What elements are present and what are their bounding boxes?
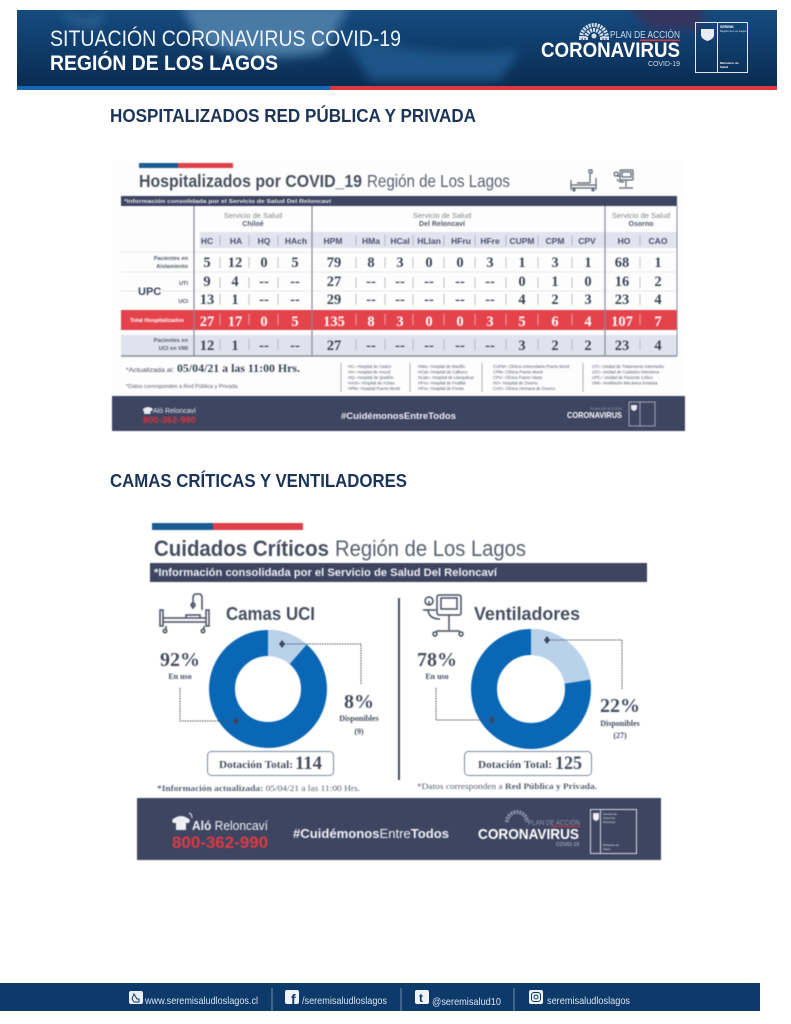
info band [150,563,647,582]
icon: ventilator small [614,170,633,188]
seremi logo: Ministerio de [720,61,739,65]
panel footer band [137,798,661,860]
row: uti: -- [424,274,434,290]
row: pacientes vmi: 27 [327,338,341,354]
row: uti [203,274,662,290]
row: uci: 13 [200,292,214,308]
service header: chiloe: Chiloé [242,221,264,228]
callout: disponibles ventiladores [544,636,640,740]
row: pacientes vmi: -- [259,338,269,354]
row: uci: -- [259,292,269,308]
row: total hospitalizados: 7 [654,314,662,330]
row: pacientes vmi: -- [455,338,465,354]
flag strip [139,163,233,168]
legend: clinics and units: CUPM= Clínica Universitaria Puerto Montt [493,364,570,369]
row: uci: -- [485,292,495,308]
row: total hospitalizados: 27 [200,314,214,330]
row labels: UCI [178,299,188,305]
hotline number: 800-362-990 [172,833,268,852]
row labels: UCI en VMI [159,346,188,352]
row: uti: 27 [327,274,341,290]
panel title: Cuidados Críticos [154,536,329,561]
icon: web [129,991,143,1004]
callout: en uso ventiladores: 78% [417,649,457,671]
row labels: Total Hospitalizados [130,318,184,324]
row: aislamiento: 0 [425,255,433,271]
callout: en uso camas: 92% [160,649,200,671]
column codes: HFru [451,236,471,246]
hotline name: Aló Reloncaví [153,408,196,415]
ministry logo: Ministerio de [603,843,619,847]
vmi band [121,335,677,355]
row labels [130,256,189,352]
ministry logo: Salud [603,847,611,851]
row separators [121,252,677,291]
legend: hospitals: HQ= Hospital de Quellón [348,375,394,380]
plan de accion label: PLAN DE ACCIÓN [528,818,580,827]
column codes: HLlan [417,236,441,246]
callout: disponibles ventiladores: Disponibles [600,719,640,728]
camas uci label: Camas UCI [226,604,315,624]
column codes [201,236,668,246]
ministry logo: Servicio de [603,812,617,816]
heading: camas criticas: CAMAS CRÍTICAS Y VENTILADORES [110,470,407,491]
column codes: HAch [285,236,307,246]
row: uti: 16 [615,274,629,290]
row: uci: 23 [615,292,629,308]
row: uti: 0 [584,274,592,290]
seremi logo: SEREMI [720,25,733,29]
row: total hospitalizados: 17 [228,314,242,330]
header title line 2: REGIÓN DE LOS LAGOS [50,51,278,75]
box: dotacion ventiladores: Dotación Total: [478,760,552,771]
callout: disponibles camas: (9) [354,727,364,736]
column codes: CPM [546,236,564,246]
icon: plan de accion dome [581,25,607,38]
total band [121,310,677,330]
service header: osorno: Servicio de Salud [612,211,670,220]
hashtag: #CuidémonosEntreTodos [341,411,456,422]
row: aislamiento: 0 [456,255,464,271]
row: pacientes vmi: -- [424,338,434,354]
legend: clinics and units: UTI= Unidad de Tratamiento Intermedio [592,364,665,369]
icon: phone small [143,407,153,414]
row: aislamiento: 79 [327,255,341,271]
update note: *Actualizada al: [126,367,174,374]
row: uti: -- [485,274,495,290]
row: aislamiento: 1 [654,255,662,271]
legend: clinics and units: HO= Hospital de Osorno [493,380,538,386]
callout: disponibles ventiladores: 22% [600,695,640,717]
logo small [629,402,655,426]
row: pacientes vmi: 1 [231,338,239,354]
row: uti: 1 [551,274,559,290]
plan de accion label: PLAN DE ACCIÓN [610,28,680,41]
row: uci: 4 [654,292,662,308]
column codes: HFre [480,236,500,246]
row: aislamiento: 68 [615,255,629,271]
row: total hospitalizados: 3 [486,314,494,330]
legend separators [341,363,583,392]
row: pacientes vmi: 3 [518,338,526,354]
instagram handle: seremisaludloslagos [547,995,630,1007]
row: uci: 2 [551,292,559,308]
legend: hospitals: HFre= Hospital de Fresia [418,386,464,391]
service header: osorno: Osorno [629,221,653,228]
hotline name: Aló Reloncaví [192,818,268,833]
row: total hospitalizados: 0 [456,314,464,330]
row: uti: -- [259,274,269,290]
legend: hospitals: HC= Hospital de Castro [348,364,392,369]
row: total hospitalizados: 107 [611,314,633,330]
legend: hospitals: HLlan= Hospital de Llanquihue [418,375,475,380]
row labels: Pacientes en [154,256,189,262]
column codes: HQ [258,236,271,246]
icon: hospital bed [160,594,209,633]
plan label small: PLAN DE ACCIÓN [590,406,622,411]
column codes: HPM [324,236,342,246]
row: aislamiento: 1 [518,255,526,271]
legend: clinics and units [493,364,665,391]
heading: hospitalizados: HOSPITALIZADOS RED PÚBLICA Y PRIVADA [110,105,476,126]
icon: tumblr: t [419,991,423,1005]
icon: dome [507,812,527,822]
row: aislamiento: 5 [203,255,211,271]
ministry logo [590,809,636,854]
column codes: HA [230,236,242,246]
icon: ventilator [423,595,463,636]
row labels: Pacientes en [154,338,189,344]
row: pacientes vmi: 23 [615,338,629,354]
callout: en uso ventiladores [417,649,495,724]
covid-19 label: COVID-19 [556,842,579,848]
flag strip [152,523,303,530]
service header: reloncavi [413,211,471,228]
icon: facebook [285,990,299,1007]
seremi logo: Salud [720,65,728,69]
row: pacientes vmi [200,338,662,354]
service header: reloncavi: Del Reloncaví [419,221,466,228]
service header: osorno [612,211,670,228]
seremi logo [696,22,748,73]
row labels: UPC [138,286,161,298]
callout: disponibles ventiladores: (27) [613,731,627,740]
row: uti: -- [395,274,405,290]
row: total hospitalizados: 3 [396,314,404,330]
hashtag: #CuidémonosEntreTodos [293,826,449,841]
legend: clinics and units: CAO= Clínica Alemana de Osorno [493,386,556,391]
callout: en uso camas [160,649,239,725]
row: total hospitalizados: 5 [518,314,526,330]
row: uti: 0 [518,274,526,290]
info band: *Información consolidada por el Servicio de Salud Del Reloncaví [124,199,331,205]
legend: hospitals: HPM= Hospital Puerto Montt [348,386,401,391]
column codes: HO [618,236,631,246]
icon: facebook: f [291,991,296,1007]
row: uti: -- [290,274,300,290]
row: aislamiento: 5 [291,255,299,271]
row: uci: -- [424,292,434,308]
info band: *Información consolidada por el Servicio de Salud Del Reloncaví [154,567,498,579]
column codes: CUPM [509,236,535,246]
row: total hospitalizados: 0 [260,314,268,330]
footer bar [0,983,760,1011]
callout: en uso ventiladores: En uso [425,672,449,681]
panel: cuidados criticos [137,523,661,860]
legend: clinics and units: CPV= Clínica Puerto Varas [493,375,542,380]
box: dotacion camas [208,752,334,776]
total row tick marks [220,314,640,325]
service header: chiloe [224,211,282,228]
update note: 05/04/21 a las 11:00 Hrs. [177,363,300,375]
row: pacientes vmi: -- [395,338,405,354]
code header band [200,232,677,248]
coronavirus label: CORONAVIRUS [541,39,680,62]
table title: Hospitalizados por COVID_19 [139,171,362,191]
row: pacientes vmi: -- [485,338,495,354]
row: aislamiento: 3 [396,255,404,271]
panel title: Región de Los Lagos [335,536,526,561]
row: uci: 1 [231,292,239,308]
legend: clinics and units: UPC= Unidad de Paciente Crítico [592,375,654,380]
red underline [640,40,680,41]
box: dotacion camas: 114 [295,753,322,774]
icon: instagram [529,990,543,1004]
icon: tumblr [415,990,429,1005]
legend: hospitals: HFru= Hospital de Frutillar [418,380,467,386]
header banner [17,4,777,90]
row: uti: 2 [654,274,662,290]
update note: *Datos corresponden a Red Pública y Privada. [126,384,239,390]
column codes: CAO [649,236,668,246]
legend: hospitals [348,364,475,391]
red underline [551,826,580,827]
legend: clinics and units: VMI= Ventilación Mecánica Invasiva [592,380,658,386]
service header: chiloe: Servicio de Salud [224,211,282,220]
row: aislamiento: 1 [584,255,592,271]
row: uci: -- [455,292,465,308]
row: total hospitalizados: 6 [551,314,559,330]
row: total hospitalizados: 5 [291,314,299,330]
row: pacientes vmi: 2 [584,338,592,354]
row: uci: -- [290,292,300,308]
ministry logo: Salud Del [603,816,616,820]
note: datos: *Datos corresponden a Red Pública y Privada. [417,781,597,791]
covid-19 label: COVID-19 [648,59,680,68]
row: uci: 29 [327,292,341,308]
callout: disponibles camas [279,640,379,736]
callout: disponibles camas: Disponibles [339,714,379,723]
separators [272,988,514,1011]
box: dotacion camas: Dotación Total: [219,760,293,771]
facebook handle: /seremisaludloslagos [302,995,387,1007]
row: total hospitalizados: 0 [425,314,433,330]
row: pacientes vmi: 12 [200,338,214,354]
row: aislamiento [203,255,662,271]
header title line 1: SITUACIÓN CORONAVIRUS COVID-19 [50,26,401,51]
row: uci [200,292,662,308]
legend: hospitals: HAch= Hospital de Achao [348,380,395,386]
chart: donut camas uci [222,630,314,735]
row: pacientes vmi: 4 [654,338,662,354]
column codes: HCal [390,236,410,246]
table frame lines [121,206,677,356]
row: aislamiento: 3 [486,255,494,271]
row: total hospitalizados [200,314,662,330]
row: aislamiento: 8 [367,255,375,271]
row: pacientes vmi: -- [290,338,300,354]
divider [398,598,400,780]
row: uti: 4 [231,274,239,290]
row: uci: -- [395,292,405,308]
row: uti: 9 [203,274,211,290]
row: uci: -- [366,292,376,308]
callout: disponibles camas: 8% [344,691,374,713]
column tick marks [220,235,640,350]
coronavirus label: CORONAVIRUS [478,826,579,843]
row labels: Aislamiento [156,264,189,270]
legend: hospitals: HCal= Hospital de Calbuco [418,370,468,375]
row: pacientes vmi: -- [366,338,376,354]
legend: hospitals: HA= Hospital de Ancud [348,370,391,375]
row: aislamiento: 3 [551,255,559,271]
row: uti: -- [455,274,465,290]
coronavirus small: CORONAVIRUS [567,410,622,420]
ministry logo: Reloncaví [603,820,616,824]
note: actualizada: *Información actualizada: 05/04/21 a las 11:00 Hrs. [157,783,360,793]
column codes: CPV [578,236,596,246]
row: uci: 4 [518,292,526,308]
row: total hospitalizados: 8 [367,314,375,330]
row: aislamiento: 12 [228,255,242,271]
chart: donut ventiladores [484,629,590,736]
row: uci: 3 [584,292,592,308]
table title [139,171,510,191]
box: dotacion ventiladores [464,752,592,776]
legend: clinics and units: CPM= Clínica Puerto Montt [493,370,544,375]
row: aislamiento: 0 [260,255,268,271]
icon: bed small [571,170,596,191]
info band [121,196,677,206]
row labels: UTI [179,281,188,287]
box: dotacion ventiladores: 125 [555,753,582,774]
row: uti: -- [366,274,376,290]
service header: reloncavi: Servicio de Salud [413,211,471,220]
icon: phone [172,813,192,830]
column codes: HC [201,236,213,246]
legend: hospitals: HMa= Hospital de Maullín [418,364,466,369]
row: total hospitalizados: 135 [323,314,345,330]
twitter handle: @seremisalud10 [432,996,501,1008]
panel title [154,536,526,561]
callout: en uso camas: En uso [168,672,192,681]
panel: hospitalizados table [112,160,685,432]
legend: clinics and units: UCI= Unidad de Cuidados Intensivos [592,370,659,375]
row: pacientes vmi: 2 [551,338,559,354]
website: www.seremisaludloslagos.cl [144,995,258,1007]
update note [126,363,300,390]
row: total hospitalizados: 4 [584,314,592,330]
table title: Región de Los Lagos [367,171,510,191]
table footer band [112,396,685,431]
hotline number: 800-362-990 [143,415,196,425]
column codes: HMa [362,236,380,246]
ventiladores label: Ventiladores [474,604,580,624]
seremi logo: Región de Los Lagos [720,29,747,33]
